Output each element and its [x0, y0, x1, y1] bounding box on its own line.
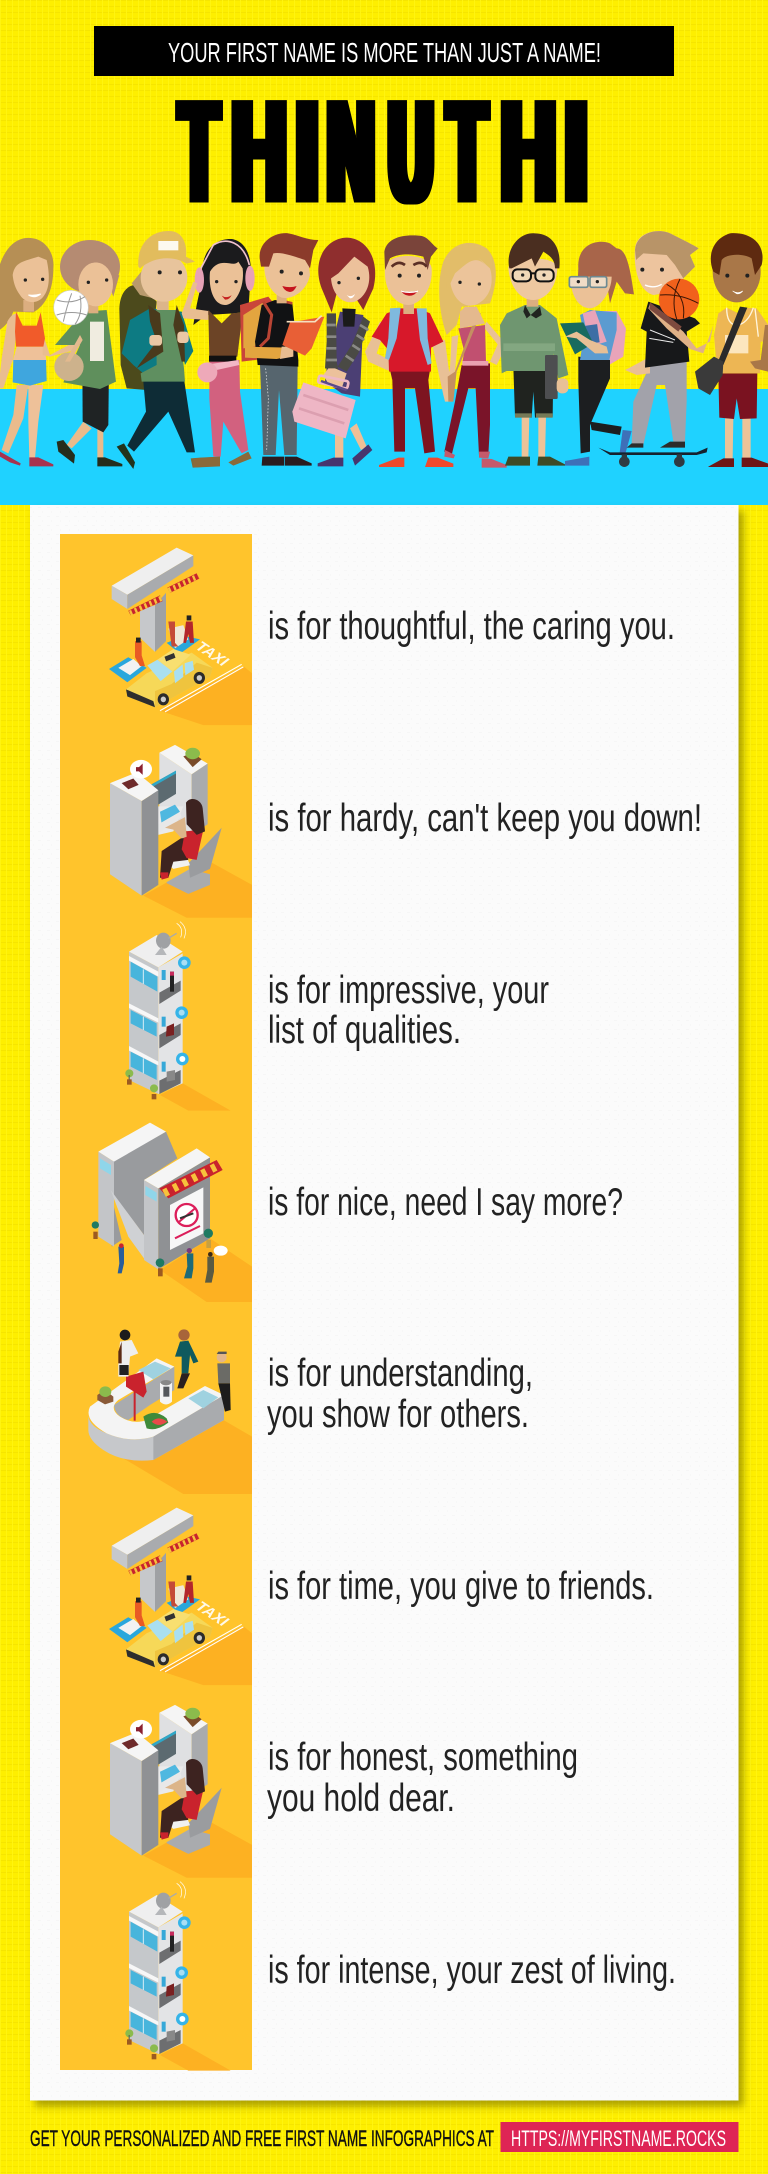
- person 11: [598, 231, 713, 467]
- title: name: H: [229, 73, 290, 235]
- row: letter N: [92, 1123, 623, 1302]
- icon: I apartment tower repeat: [125, 1882, 231, 2071]
- panel: letter meanings: [30, 505, 738, 2100]
- title: name: I: [562, 73, 591, 235]
- icon: T taxi stand: [109, 548, 252, 725]
- heading banner: [94, 26, 674, 76]
- panel background: [30, 505, 738, 2100]
- illustration: crowd of students: [0, 231, 768, 469]
- person 4: [182, 239, 255, 468]
- title: name: U: [386, 73, 436, 235]
- icon: T taxi stand repeat: TAXI: [191, 1600, 232, 1629]
- text: H second: is for honest, something: [268, 1736, 578, 1779]
- group: first four people: [0, 231, 255, 469]
- text: H second line 2: you hold dear.: [267, 1777, 455, 1820]
- blue floor band: [0, 389, 768, 505]
- icon: U service counter: [88, 1329, 252, 1494]
- text: I line 2: list of qualities.: [268, 1009, 461, 1052]
- person 1: [0, 238, 80, 466]
- person 9: [500, 233, 568, 466]
- row: letter T second: [109, 1508, 654, 1685]
- text: U: is for understanding,: [268, 1352, 533, 1395]
- row: letter H second: [110, 1705, 578, 1878]
- text: I: is for impressive, your: [268, 969, 549, 1012]
- person 6: [292, 238, 375, 466]
- icon: N restaurant: [92, 1123, 252, 1302]
- title: name: N: [325, 73, 377, 235]
- icon: H office desk repeat: [110, 1705, 252, 1878]
- row: letter I: [125, 922, 549, 1111]
- icon: T taxi stand repeat: [109, 1508, 252, 1685]
- title: name: T: [179, 73, 219, 235]
- person 10: [560, 242, 634, 466]
- title: name: H: [498, 73, 559, 235]
- icon: T taxi stand: TAXI: [191, 640, 232, 669]
- title: name: T: [447, 73, 487, 235]
- person 12: [695, 233, 768, 467]
- group: middle four people: [240, 233, 507, 468]
- person 5: [240, 233, 324, 466]
- group: last four people: [500, 231, 768, 467]
- person 8: [439, 243, 507, 468]
- row: letter H: [110, 745, 702, 918]
- row: letter I second: [125, 1882, 676, 2071]
- text: U line 2: you show for others.: [267, 1393, 529, 1436]
- icon: I apartment tower: [125, 922, 231, 1111]
- image column: [60, 534, 252, 2070]
- text: N: is for nice, need I say more?: [268, 1181, 623, 1224]
- row: letter U: [88, 1329, 533, 1494]
- icon: H office desk: [110, 745, 252, 918]
- person 7: [365, 235, 453, 467]
- title: name: I: [293, 73, 322, 235]
- footer call to action: GET YOUR PERSONALIZED AND FREE FIRST NAME INFOGRAPHICS AT: [30, 2126, 494, 2151]
- row: letter T: [109, 548, 675, 725]
- person 3: [117, 231, 220, 469]
- person 2: [54, 240, 122, 466]
